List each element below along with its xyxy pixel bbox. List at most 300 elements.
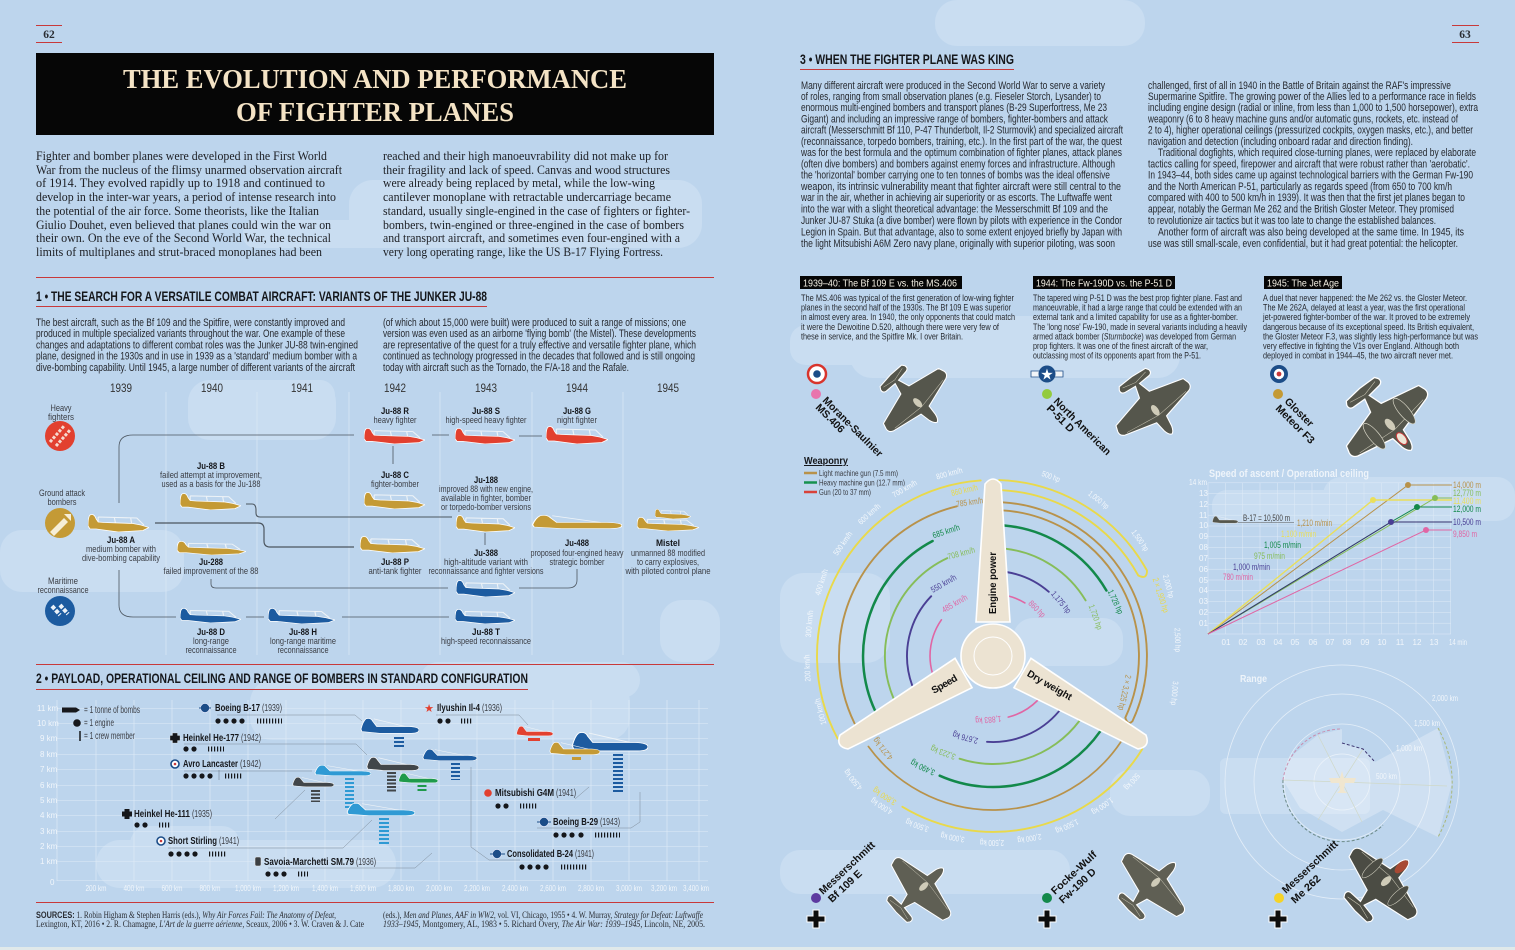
engine scale labels [1027, 469, 1182, 711]
aircraft: Messerschmitt Me 262: Me 262 [1289, 873, 1323, 906]
axes labels: 06 [1199, 565, 1208, 574]
weight scale labels: 4,000 kg [869, 796, 894, 816]
page number 62: 62 [43, 29, 55, 41]
Ju-388: Ju-388 [474, 548, 498, 558]
Mistel: Mistel [656, 538, 680, 548]
category: heavy fighters: fighters [48, 411, 74, 422]
axes labels: 13 [1430, 638, 1439, 647]
Ju-88 D: Ju-88 D [197, 627, 225, 637]
B-17 reference: B-17 = 10,500 m [1243, 513, 1290, 524]
section 3 text: to revolutionize air tactics but it was too late to change the established balances. [1148, 215, 1436, 227]
year labels: 1939 [110, 381, 132, 395]
section 3 text: Legion in Spain. But that advantage, also to some extent enjoyed briefly by Japan with [801, 226, 1122, 238]
Heinkel He-177 [170, 733, 419, 792]
sources: SOURCES: 1. Robin Higham & Stephen Harris (eds.), Why Air Forces Fail: The Anatomy of Defeat, [36, 910, 336, 921]
legend [62, 705, 140, 742]
aircraft: Messerschmitt Bf 109 E [807, 839, 970, 941]
weight scale labels: 2,000 kg [1017, 832, 1042, 845]
intro text: Giulio Douhet, even believed that planes could win the war on [36, 218, 332, 232]
engine power arcs [999, 480, 1147, 723]
panel: 1944: prop fighters. It was one of the finest aircraft of the war, [1033, 341, 1208, 352]
Ju-288 [164, 541, 258, 576]
Consolidated B-24 plane [423, 749, 477, 780]
Ju-188: Ju-188 [474, 475, 498, 485]
intro text: standard, usually single-engined in the case of fighters or fighter- [383, 204, 690, 218]
intro text: of 1914. They evolved rapidly up to 1918 and continued to [36, 176, 325, 190]
Savoia-Marchetti SM.79: Savoia-Marchetti SM.79 [264, 857, 354, 868]
leader lines [168, 715, 640, 868]
Ju-88 T: Ju-88 T [472, 627, 500, 637]
Mistel [625, 509, 710, 576]
axes labels: 03 [1199, 597, 1208, 606]
panel: 1945: very effective in fighting the V1s over England. Although both [1263, 341, 1459, 352]
Savoia-Marchetti SM.79: (1936) [356, 857, 376, 868]
Ju-88 P [360, 536, 425, 576]
Boeing B-17 [199, 703, 419, 748]
climb rates: 1,210 m/min [1297, 518, 1332, 528]
weight scale labels: 2,500 kg [980, 838, 1004, 847]
year labels: 1943 [475, 381, 497, 395]
speed of ascent chart: Speed of ascent / Operational ceiling [1209, 468, 1369, 480]
section 2 heading: 2 • PAYLOAD, OPERATIONAL CEILING AND RANGE OF BOMBERS IN STANDARD CONFIGURATION [36, 670, 528, 686]
panel: 1945: deployed in combat in 1944–45, the two aircraft never met. [1263, 350, 1453, 362]
section 1 text: today with aircraft such as the Tornado, the F/A-18 and the Rafale. [383, 362, 629, 374]
year labels: 1940 [201, 381, 223, 395]
weaponry legend: Gun (20 to 37 mm) [819, 487, 871, 497]
intro text: reached and their high manoeuvrability did not make up for [383, 149, 669, 163]
weight scale labels: 3,800 kg [871, 785, 898, 808]
B-17 reference [1212, 513, 1294, 524]
aircraft: Messerschmitt Me 262: Messerschmitt [1280, 838, 1341, 896]
speed scale labels: 500 km/h [832, 530, 854, 557]
speed scale labels: 600 km/h [856, 502, 882, 527]
Savoia-Marchetti plane [399, 773, 438, 791]
weight scale labels: 1,883 kg [975, 714, 1002, 726]
Mistel: to carry explosives, [637, 556, 699, 567]
blade labels: Dry weight [1025, 669, 1074, 703]
aircraft: Focke-Wulf Fw-190 D: Fw-190 D [1057, 866, 1099, 906]
Ilyushin Il-4: ★ [424, 703, 434, 715]
Mitsubishi G4M: Mitsubishi G4M [495, 788, 554, 799]
page edge strip [0, 947, 1515, 950]
aircraft: Focke-Wulf Fw-190 D [1038, 834, 1204, 939]
ceiling values: 10,500 m [1453, 517, 1481, 527]
axis labels: 2 km [40, 842, 58, 851]
panel: 1944 [1033, 276, 1247, 362]
axes labels: 04 [1274, 638, 1283, 647]
section 1 text: produced in multiple specialized variants throughout the war. One example of these [36, 328, 345, 340]
intro text: Fighter and bomber planes were developed in the First World [36, 149, 328, 163]
climb rates: 1,000 m/min [1233, 562, 1270, 572]
speed scale labels: 685 km/h [931, 522, 961, 540]
intro text: were already being replaced by metal, while the low-wing [383, 176, 656, 190]
Ju-88 H: long-range maritime [270, 635, 336, 646]
axes labels: 10 [1378, 638, 1387, 647]
axes labels: 06 [1309, 638, 1318, 647]
engine scale labels: 3,000 hp [1169, 681, 1180, 706]
axis labels: 2,600 km [540, 884, 566, 893]
Ju-88 A: medium bomber with [86, 543, 156, 554]
axes labels: 14 km [1189, 478, 1207, 487]
range chart [1225, 665, 1459, 899]
year labels: 1942 [384, 381, 406, 395]
weight scale labels: 2,676 kg [951, 730, 979, 746]
Ju-88 G: Ju-88 G [563, 406, 591, 416]
legend: = 1 tonne of bombs [84, 705, 140, 716]
aircraft: Morane-Saulnier MS.406 [808, 346, 966, 460]
sources: 1933–1945, Montgomery, AL, 1983 • 5. Richard Overy, The Air War: 1939–1945, Lincoln, NE, 2005. [383, 920, 705, 930]
axes labels: 01 [1199, 619, 1208, 628]
Ju-388: reconnaissance and fighter versions [428, 565, 544, 576]
ascent lines [1208, 485, 1452, 634]
panel: 1939-40: in almost every area. In 1940, the only opponents that could match [801, 312, 1015, 323]
year labels: 1944 [566, 381, 588, 395]
axes labels: 11 [1199, 511, 1208, 520]
speed scale labels: 785 km/h [956, 495, 984, 509]
climb rates [1223, 518, 1332, 582]
engine scale labels: 1,000 hp [1086, 489, 1111, 511]
intro text: the potential of the air force. Some theorists, like the Italian [36, 204, 320, 218]
Ju-88 T [441, 609, 531, 646]
axes labels [1189, 478, 1467, 647]
Ju-88 P: anti-tank fighter [368, 565, 422, 576]
ceiling values: 11,400 m [1453, 496, 1481, 506]
Mistel: unmanned 88 modified [631, 547, 705, 558]
Ju-188: improved 88 with new engine, [439, 483, 533, 494]
speed scale labels: 400 km/h [813, 568, 830, 596]
axis labels: 800 km [200, 884, 221, 893]
ceiling values: 12,000 m [1453, 504, 1481, 514]
weight scale labels: 3,500 kg [904, 817, 930, 834]
axes labels: 04 [1199, 586, 1208, 595]
axis labels: 9 km [40, 734, 58, 743]
title: THE EVOLUTION AND PERFORMANCE [123, 64, 627, 94]
weight scale labels: 4,500 kg [842, 768, 864, 792]
Ju-388 [428, 548, 544, 597]
year labels: 1941 [291, 381, 313, 395]
intro text: bombers, twin-engined or three-engined in the case of bombers [383, 218, 684, 232]
Boeing B-29 [537, 817, 620, 838]
Ju-88 C [364, 470, 425, 509]
axes labels: 12 [1413, 638, 1422, 647]
axis labels: 4 km [40, 811, 58, 820]
blade labels [930, 552, 1074, 703]
section 3 text: (reconnaissance, torpedo bombers, training, etc.). In the first part of the war, the quest [801, 136, 1122, 148]
speed scale labels [803, 466, 984, 726]
Ju-188 [439, 475, 533, 532]
panel: 1939-40: planes in the second half of the 1930s. The Bf 109 E was superior [801, 302, 1012, 314]
Ju-88 R: heavy fighter [374, 414, 416, 425]
Avro Lancaster: (1942) [240, 759, 261, 770]
section 1 text: (of which about 15,000 were built) were produced to suit a range of missions; one [383, 317, 686, 329]
category: heavy fighters: Heavy [50, 402, 72, 413]
speed scale labels: 708 km/h [946, 545, 976, 562]
page number 63: 63 [1459, 29, 1471, 41]
Ju-488: Ju-488 [565, 538, 589, 548]
Ju-88 C: Ju-88 C [381, 470, 409, 480]
axis labels: 3,400 km [683, 884, 709, 893]
axes labels: 09 [1361, 638, 1370, 647]
section 1 text: version was even used as an airborne 'flying bomb' (the Mistel). These developments [383, 328, 696, 340]
aircraft: Messerschmitt Me 262 [1269, 827, 1439, 944]
axes labels: 05 [1291, 638, 1300, 647]
panel: 1944: armed attack bomber (Sturmbocke) was developed from German [1033, 332, 1236, 342]
ceiling values: 14,000 m [1453, 480, 1481, 490]
Ilyushin Il-4: (1936) [482, 703, 502, 714]
Ju-88 G [546, 406, 608, 444]
Ju-88 B: failed attempt at improvement, [160, 469, 262, 480]
axis labels: 2,200 km [464, 884, 490, 893]
range labels: 2,000 km [1432, 694, 1458, 703]
Ju-88 C: fighter-bomber [371, 478, 419, 489]
aircraft: Morane-Saulnier MS.406: MS.406 [813, 402, 847, 436]
intro text: develop in the inter-war years, a period of intense research into [36, 190, 336, 204]
aircraft: North American P-51 D [1031, 352, 1207, 459]
weight scale labels: 3,000 kg [940, 831, 965, 844]
Boeing B-29: (1943) [600, 817, 620, 828]
engine scale labels: 2,500 hp [1173, 628, 1182, 652]
engine scale labels: 860 hp [1027, 598, 1048, 620]
section 3 text: Many different aircraft were produced in the Second World War to serve a variety [801, 80, 1106, 92]
axis labels: 3,000 km [616, 884, 642, 893]
speed of ascent chart [1189, 468, 1481, 647]
Ju-88 B: Ju-88 B [197, 461, 225, 471]
blade labels: Speed [930, 673, 960, 697]
Ju-88 T: high-speed reconnaissance [441, 635, 531, 646]
axes labels: 14 min [1449, 638, 1467, 647]
axes labels: 08 [1343, 638, 1352, 647]
intro text: War from the nucleus of the flimsy unarmed observation aircraft [36, 163, 342, 177]
engine scale labels: 1,175 hp [1049, 589, 1074, 615]
Short Stirling [157, 803, 415, 857]
section 3 heading: 3 • WHEN THE FIGHTER PLANE WAS KING [800, 51, 1014, 67]
climb rates: 780 m/min [1223, 572, 1253, 582]
section 1 text [36, 317, 696, 374]
climb rates: 975 m/min [1254, 551, 1285, 561]
axis labels: 5 km [40, 796, 58, 805]
weaponry legend: Weaponry [804, 456, 848, 467]
range sectors [1283, 728, 1452, 837]
ceiling values: 9,850 m [1453, 529, 1477, 539]
axis labels: 200 km [86, 884, 107, 893]
Boeing B-29 plane [572, 732, 648, 793]
axis labels: 11 km [37, 704, 59, 713]
aircraft: Morane-Saulnier MS.406: Morane-Saulnier [820, 395, 885, 460]
panel: 1939-40 [800, 276, 1015, 342]
axes labels: 10 [1199, 521, 1208, 530]
speed scale labels: 700 km/h [891, 478, 919, 499]
title: OF FIGHTER PLANES [236, 97, 514, 127]
axis labels: 600 km [162, 884, 183, 893]
panel: 1944: outclassing most of its opponents apart from the P-51. [1033, 350, 1201, 362]
propeller radial chart [803, 466, 1182, 847]
Mitsubishi G4M plane [550, 742, 600, 760]
Ju-488: proposed four-engined heavy [530, 547, 624, 558]
axis labels: 3 km [40, 827, 58, 836]
Ju-88 B: used as a basis for the Ju-188 [162, 478, 260, 489]
Ju-88 R [364, 406, 425, 444]
Heinkel He-111: Heinkel He-111 [134, 809, 190, 820]
section 1 heading: 1 • THE SEARCH FOR A VERSATILE COMBAT AIRCRAFT: VARIANTS OF THE JUNKER JU-88 [36, 288, 487, 304]
sources: (eds.), Men and Planes, AAF in WW2, vol. VI, Chicago, 1955 • 4. W. Murray, Strategy for Defeat: Luftwaffe [383, 910, 703, 921]
panel: 1944: manoeuvrable, it had a large range that could be extended with an [1033, 302, 1242, 314]
panel: 1944: external tank and a limited capability for use as a fighter-bomber. [1033, 312, 1238, 323]
speed scale labels: 300 km/h [804, 610, 815, 638]
speed scale labels: 100 km/h [813, 697, 828, 726]
axis labels: 1 km [40, 857, 58, 866]
axes labels: 07 [1326, 638, 1335, 647]
Ju-88 G: night fighter [557, 414, 597, 425]
category: ground attack bombers: Ground attack [39, 487, 85, 498]
Avro Lancaster [171, 759, 371, 808]
section 3 text: was for the best formula and the optimum combination of fighter planes, attack planes [800, 147, 1122, 159]
Heinkel He-177: Heinkel He-177 [183, 733, 239, 744]
axis labels: 1,000 km [235, 884, 261, 893]
engine scale labels: 2,000 hp [1161, 574, 1176, 600]
axes labels: 01 [1222, 638, 1231, 647]
propeller blades and hub [831, 479, 1155, 759]
weaponry legend: Light machine gun (7.5 mm) [819, 468, 898, 478]
range labels: 500 km [1376, 772, 1397, 781]
Mistel: with piloted control plane [625, 565, 710, 576]
panel: 1944: 1944: The Fw-190D vs. the P-51 D [1036, 278, 1172, 290]
intro text [36, 149, 690, 259]
speed scale labels: 200 km/h [803, 654, 812, 682]
legend: = 1 engine [84, 718, 114, 729]
ceiling markers [1370, 482, 1438, 533]
aircraft: Messerschmitt Bf 109 E: Bf 109 E [826, 868, 865, 905]
axes labels: 07 [1199, 554, 1208, 563]
section 3 text: navigation and detection (including onboard radar and direction finding). [1148, 136, 1413, 148]
Heinkel He-111 [122, 777, 334, 828]
aircraft: Gloster Meteor F3: Meteor F3 [1273, 403, 1317, 447]
Heinkel He-111: (1935) [192, 809, 212, 820]
Avro Lancaster: Avro Lancaster [183, 759, 238, 770]
engine scale labels: 1,728 hp [1106, 588, 1126, 616]
Boeing B-17: Boeing B-17 [215, 703, 260, 714]
Ju-488: strategic bomber [550, 556, 604, 567]
weaponry legend: Heavy machine gun (12.7 mm) [819, 478, 905, 488]
axis labels: 2,800 km [578, 884, 604, 893]
weight scale labels: 1,000 kg [1090, 795, 1115, 817]
page number 62 [36, 26, 62, 42]
intro text: their own. On the eve of the Second World War, the technical [36, 231, 331, 245]
dry weight arcs [868, 700, 1142, 832]
section 1 text: dive-bombing capability. Until 1945, a large number of different variants of the aircraft [36, 362, 355, 374]
Short Stirling: Short Stirling [168, 836, 217, 847]
Ju-88 B [160, 461, 262, 510]
panel: 1945 [1262, 276, 1478, 362]
weight scale labels: 4,271 kg [870, 736, 895, 762]
speed arcs [817, 480, 981, 739]
speed scale labels: 800 km/h [935, 466, 964, 481]
axis labels: 2,000 km [426, 884, 452, 893]
Ju-88 A: Ju-88 A [107, 535, 135, 545]
Ju-288: Ju-288 [199, 557, 223, 567]
panel: 1939-40: The MS.406 was typical of the first generation of low-wing fighter [801, 293, 1015, 304]
aircraft: Gloster Meteor F3: Gloster [1282, 396, 1316, 430]
section 1 text: are representative of the quest for a truly effective and versatile fighter plane, which [383, 340, 696, 352]
intro text: cantilever monoplane with retractable undercarriage became [383, 190, 671, 204]
axes labels: 11 [1396, 638, 1405, 647]
Ju-188: or torpedo-bomber versions [441, 501, 531, 512]
axes labels: 02 [1239, 638, 1248, 647]
axis labels: 8 km [40, 750, 58, 759]
section 3 text: aircraft (Messerschmitt Bf 110, P-47 Thunderbolt, Il-2 Sturmovik) and specialized aircraft [801, 124, 1123, 136]
category: ground attack bombers [39, 487, 85, 538]
sources [36, 902, 714, 930]
bomber payload / ceiling / range chart [37, 700, 709, 893]
range labels [1376, 694, 1458, 781]
intro text: very long operating range, like the US B-17 Flying Fortress. [383, 245, 663, 259]
range chart: Range [1240, 673, 1267, 685]
aircraft: North American P-51 D: ★ [1040, 366, 1054, 384]
Heinkel He-177: (1942) [241, 733, 261, 744]
weight scale labels: 3,490 kg [909, 758, 937, 778]
section 3 text: of roles, ranging from small observation planes (e.g. Fieseler Storch, Lysander) to [801, 91, 1101, 103]
Ilyushin Il-4: Ilyushin Il-4 [437, 703, 480, 714]
Ju-88 D: long-range [193, 635, 229, 646]
Consolidated B-24: Consolidated B-24 [507, 849, 573, 860]
panel: 1944: The tapered wing P-51 D was the best prop fighter plane. Fast and [1033, 293, 1242, 304]
section 3 text: war in the air, whether in achieving air superiority or as escorts. The Luftwaffe went [800, 192, 1112, 204]
aircraft: Messerschmitt Bf 109 E: Messerschmitt [817, 839, 878, 897]
connector lines [119, 435, 577, 617]
axis labels: 7 km [40, 765, 58, 774]
panel: 1944: The 'long nose' Fw-190, made in several variants including a heavily [1033, 322, 1247, 333]
aircraft: Focke-Wulf Fw-190 D: Focke-Wulf [1049, 849, 1100, 897]
Ilyushin Il-4 [424, 703, 553, 741]
panel: 1945: 1945: The Jet Age [1267, 278, 1339, 290]
Ju-88 S: Ju-88 S [472, 406, 500, 416]
Ju-88 P: Ju-88 P [381, 557, 409, 567]
climb rates: 1,100 m/min [1281, 529, 1316, 539]
Consolidated B-24 [490, 849, 594, 870]
intro text: and transport aircraft, and sometimes even four-engined with a [383, 231, 680, 245]
axis labels: 0 [50, 878, 55, 887]
engine scale labels: 2 × 3,225 hp [1116, 674, 1134, 711]
Ju-88 D: reconnaissance [186, 644, 236, 655]
Ju-488 [530, 515, 624, 567]
axis labels: 1,800 km [388, 884, 414, 893]
Ju-388: high-altitude variant with [444, 556, 528, 567]
section 3 text: Gigant) and including an impressive range of bombers, fighter-bombers and attack [801, 114, 1109, 126]
axis labels: 10 km [37, 719, 59, 728]
central plane [1329, 771, 1356, 793]
section 3 text: Junker JU-87 Stuka (a dive bomber) were flown by pilots with experience in the Condor [801, 215, 1122, 227]
year labels: 1945 [657, 381, 679, 395]
Ju-88 S [446, 406, 526, 444]
section 3 text: into the war with a slight theoretical advantage: the Messerschmitt Bf 109 and the [801, 204, 1108, 216]
axis labels: 400 km [124, 884, 145, 893]
axis labels: 1,200 km [273, 884, 299, 893]
Ju-88 R: Ju-88 R [381, 406, 409, 416]
section 1 text: plane, designed in the 1930s and in use in 1939 as a 'standard' medium bomber with a [36, 350, 357, 362]
weight scale labels: 1,500 kg [1054, 817, 1080, 835]
panel: 1939-40: 1939–40: The Bf 109 E vs. the MS.406 [803, 278, 957, 290]
axes labels: 12 [1199, 500, 1208, 509]
weight scale labels: 3,223 kg [929, 744, 957, 762]
ceiling values: 12,770 m [1453, 488, 1481, 498]
axis labels: 3,200 km [651, 884, 677, 893]
axes labels: 03 [1257, 638, 1266, 647]
axes labels: 13 [1199, 489, 1208, 498]
section 1 text: The best aircraft, such as the Bf 109 and the Spitfire, were constantly improved and [36, 317, 345, 329]
axes labels: 05 [1199, 576, 1208, 585]
Ju-88 A [82, 514, 160, 563]
section 3 text: (often dive bombers) and bombers against enemy forces and infrastructure. Although [801, 158, 1115, 170]
axis labels [37, 704, 709, 893]
